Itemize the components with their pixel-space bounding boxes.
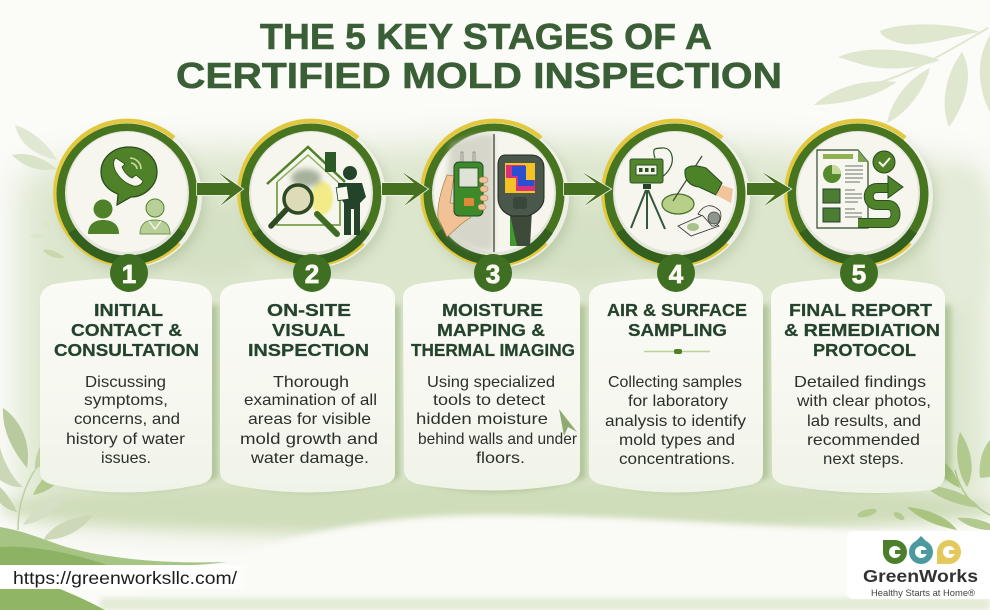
badge: number 3: 3 — [486, 259, 500, 289]
panel: step 2 circle — [239, 121, 387, 272]
text: card 4 description: Collecting samples — [608, 374, 742, 391]
icon: speech bubble with phone and two people — [88, 147, 170, 234]
text: card 4 description: mold types and — [619, 432, 735, 449]
text: card 5 description: with clear photos, — [796, 393, 931, 410]
icon: moisture meter in hand and thermal camera — [438, 134, 544, 252]
heading: moisture mapping and thermal imaging: THERMAL IMAGING — [411, 340, 575, 360]
text: card 5 description: recommended — [807, 432, 920, 449]
arrow: 4 to 5 — [747, 172, 791, 206]
leaf sprig: upper left — [12, 125, 65, 258]
leaf sprig: lower left — [0, 408, 93, 540]
text: card 4 description: concentrations. — [619, 451, 735, 468]
text: card 3 description — [416, 374, 578, 467]
heading: air and surface sampling: SAMPLING — [628, 320, 727, 340]
text: card 3 description: hidden moisture — [416, 411, 548, 428]
panel: card 2 — [220, 278, 395, 492]
icon: sampling camera on tripod, petri dish, gloved hand, tape — [630, 148, 733, 236]
heading: initial contact and consultation — [54, 300, 199, 360]
leaf sprig: lower right — [856, 432, 990, 530]
panel: step 5 circle — [786, 121, 934, 272]
logo: GreenWorks — [847, 531, 990, 599]
badge: number 2 — [293, 254, 331, 292]
heading: final report and remediation protocol — [784, 300, 940, 360]
arrow: 1 to 2 — [197, 172, 243, 206]
text: card 5 description — [794, 374, 931, 468]
url bar — [0, 565, 250, 589]
text: card 1 description — [66, 374, 186, 467]
arrow: 2 to 3 — [382, 172, 428, 206]
badge: number 5: 5 — [852, 259, 866, 289]
panel: card 1 — [40, 278, 212, 492]
badge: number 1: 1 — [122, 259, 136, 289]
leaf sprig: top right — [814, 24, 990, 127]
text: card 1 description: history of water — [66, 431, 186, 448]
text: card 1 description: concerns, and — [74, 411, 180, 428]
bottom-left green hills — [0, 527, 227, 610]
heading: air and surface sampling: AIR & SURFACE — [607, 300, 747, 320]
text: card 1 description: symptoms, — [84, 392, 168, 409]
text: card 3 description: floors. — [476, 450, 525, 467]
heading: on-site visual inspection: ON-SITE — [267, 300, 351, 320]
icon: small grass blade — [559, 409, 577, 436]
heading: initial contact and consultation: CONSULTATION — [54, 340, 199, 360]
panel: step 1 circle — [55, 121, 203, 272]
badge: number 4: 4 — [669, 259, 684, 289]
icon: report document with route arrow — [817, 150, 903, 228]
text: card 3 description: behind walls and under — [418, 431, 578, 448]
arrow: 3 to 4 — [564, 172, 611, 206]
text: card 4 description: analysis to identify — [605, 413, 746, 430]
heading: on-site visual inspection: INSPECTION — [248, 340, 369, 360]
icon: house, magnifier, flashlight and inspector — [267, 147, 366, 235]
title: THE 5 KEY STAGES OF A — [260, 16, 712, 57]
text: card 2 description: water damage. — [250, 450, 369, 467]
text: card 5 description: next steps. — [823, 451, 904, 468]
divider — [644, 349, 710, 354]
logo: GreenWorks: GreenWorks — [863, 566, 978, 586]
logo icon: three G marks — [883, 536, 961, 564]
text: card 5 description: Detailed findings — [794, 374, 926, 391]
text: card 1 description: issues. — [101, 450, 151, 467]
logo: GreenWorks: Healthy Starts at Home® — [871, 588, 975, 599]
heading: on-site visual inspection: VISUAL — [272, 320, 345, 340]
heading: initial contact and consultation: INITIAL — [94, 300, 163, 320]
badge: number 2: 2 — [305, 259, 319, 289]
badge: number 4 — [657, 254, 695, 292]
heading: moisture mapping and thermal imaging: MOISTURE — [442, 300, 543, 320]
panel: card 4 — [589, 278, 763, 492]
panel: card 3 — [403, 278, 580, 490]
panel: step 3 circle — [422, 121, 570, 272]
card shadows — [44, 305, 951, 492]
title: CERTIFIED MOLD INSPECTION — [176, 55, 782, 96]
badge: number 5 — [840, 254, 878, 292]
badge: number 3 — [474, 254, 512, 292]
text: card 3 description: tools to detect — [433, 392, 546, 409]
heading: final report and remediation protocol: FINAL REPORT — [789, 300, 932, 320]
heading: final report and remediation protocol: PROTOCOL — [813, 340, 916, 360]
text: card 5 description: lab results, and — [807, 413, 921, 430]
text: card 2 description: examination of all — [244, 392, 377, 409]
heading: on-site visual inspection — [248, 300, 369, 360]
text: card 2 description — [240, 374, 378, 467]
text: card 4 description: for laboratory — [628, 393, 728, 410]
heading: moisture mapping and thermal imaging: MAPPING & — [437, 320, 545, 340]
url bar: https://greenworksllc.com/ — [13, 568, 237, 588]
text: card 2 description: Thorough — [273, 374, 349, 391]
heading: air and surface sampling — [607, 300, 747, 340]
text: card 2 description: mold growth and — [240, 431, 378, 448]
title — [176, 16, 782, 96]
panel: step 4 circle — [603, 121, 751, 272]
text: card 1 description: Discussing — [85, 374, 166, 391]
text: card 3 description: Using specialized — [427, 374, 555, 391]
badge: number 1 — [110, 254, 148, 292]
panel: card 5 — [771, 278, 945, 493]
text: card 2 description: areas for visible — [248, 411, 371, 428]
heading: final report and remediation protocol: & REMEDIATION — [784, 320, 940, 340]
text: card 4 description — [605, 374, 746, 468]
heading: moisture mapping and thermal imaging — [411, 300, 575, 360]
heading: initial contact and consultation: CONTACT & — [71, 320, 182, 340]
